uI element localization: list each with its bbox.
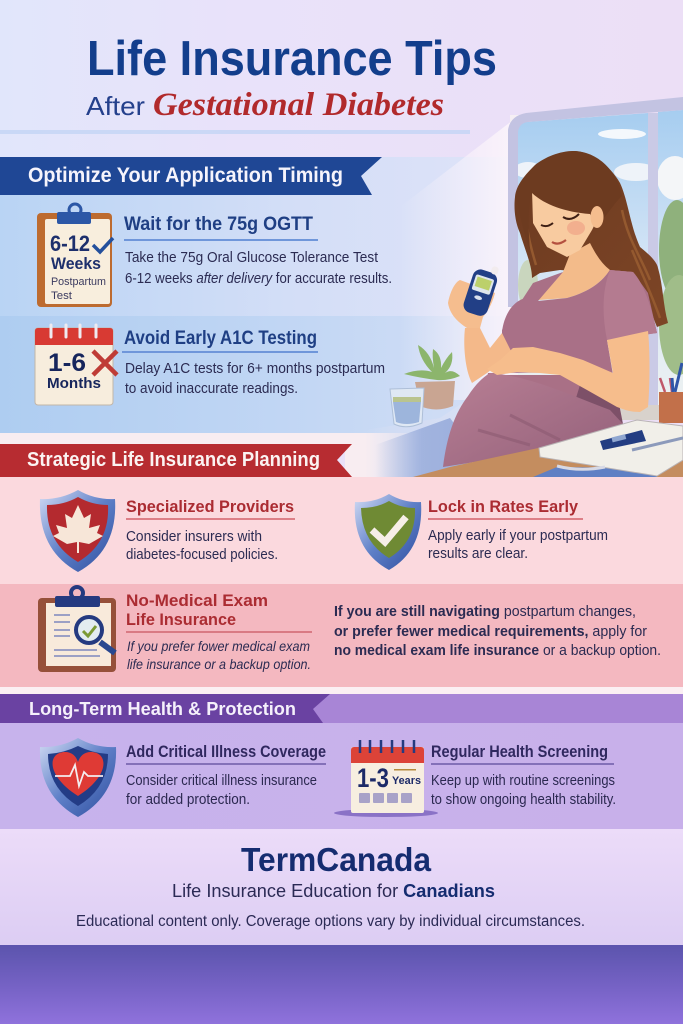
ear [590, 206, 604, 228]
icon: clipboard 6-12 weeks: Test [51, 290, 72, 302]
text block: critical illness: Add Critical Illness Coverage [126, 742, 326, 761]
potted plant [404, 345, 460, 410]
icon: calendar 1-3 years: 1-3 [357, 763, 389, 793]
panel: footer [0, 829, 683, 945]
chest and neck [538, 243, 610, 300]
belly [443, 373, 623, 467]
title block [86, 32, 497, 123]
blush [567, 221, 585, 235]
text block: lock in rates: Lock in Rates Early [428, 497, 579, 516]
icon: clipboard 6-12 weeks: Postpartum [51, 276, 106, 288]
water glass [390, 388, 424, 427]
lower shirt shadow [560, 373, 623, 450]
resting arm and hand [487, 331, 650, 412]
front hair [516, 151, 622, 250]
icon: clipboard 6-12 weeks [37, 204, 113, 307]
icon: maple leaf shield [40, 490, 115, 572]
icon: calendar 1-3 years: Years [392, 775, 421, 787]
illustration: pregnant woman with glucose meter [443, 151, 668, 467]
text block: specialized providers: diabetes-focused policies. [126, 547, 278, 563]
text block: postpartum changes advice: or prefer fewer medical requirements, apply for [334, 624, 647, 640]
text block: postpartum changes advice: If you are still navigating postpartum changes, [334, 604, 636, 620]
face [532, 190, 597, 257]
text block: lock in rates: results are clear. [428, 546, 528, 562]
window scene [508, 97, 683, 420]
text block: no-medical exam [126, 591, 312, 672]
panel: long-term health [0, 694, 683, 829]
light beam [400, 120, 513, 400]
icon: heart shield [40, 738, 116, 817]
panel: strategic planning [0, 477, 683, 687]
title block: Gestational Diabetes [153, 87, 444, 123]
text block: no-medical exam: Life Insurance [126, 610, 236, 629]
text block: wait for the OGTT [124, 214, 392, 287]
ribbon: application timing: Optimize Your Application Timing [28, 164, 343, 187]
text block: wait for the OGTT: Wait for the 75g OGTT [124, 214, 313, 235]
title block: After [86, 91, 145, 121]
text block: specialized providers [126, 497, 295, 563]
text block: avoid early A1C: Delay A1C tests for 6+ months postpartum [125, 361, 385, 377]
text block: specialized providers: Consider insurers with [126, 529, 262, 545]
text block: avoid early A1C: to avoid inaccurate readings. [125, 381, 298, 397]
text block: no-medical exam: If you prefer fower medical exam [127, 638, 310, 654]
text block: avoid early A1C: Avoid Early A1C Testing [124, 328, 317, 349]
icon: calendar 1-3 years [334, 740, 438, 817]
footer brand and disclaimer: Life Insurance Education for Canadians [172, 881, 495, 901]
icon: clipboard with magnifier [38, 587, 116, 672]
icon: calendar 1-6 months: Months [47, 375, 101, 392]
title block: Life Insurance Tips [87, 32, 497, 86]
smile [552, 240, 566, 244]
ribbon: application timing [0, 157, 382, 195]
ribbon: long-term health [0, 694, 330, 723]
icon: calendar 1-6 months: 1-6 [48, 349, 86, 377]
ribbon: strategic planning [0, 444, 352, 477]
text block: avoid early A1C [122, 328, 385, 397]
icon: clipboard 6-12 weeks: 6-12 [50, 231, 90, 256]
glucose meter [461, 261, 501, 318]
hand holding meter [448, 280, 495, 328]
papers with meter and pen [539, 420, 683, 476]
text block: lock in rates: Apply early if your postpartum [428, 528, 608, 544]
text block: wait for the OGTT: 6-12 weeks after delivery for accurate results. [125, 271, 392, 287]
bottom band [0, 945, 683, 1024]
text block: postpartum changes advice: no medical exam life insurance or a backup option. [334, 643, 661, 659]
hair strands [526, 205, 660, 318]
text block: no-medical exam: life insurance or a backup option. [127, 656, 311, 672]
gap [0, 687, 683, 694]
desk [413, 440, 683, 477]
text block: health screening: Regular Health Screening [431, 742, 608, 761]
footer brand and disclaimer: TermCanada [241, 841, 432, 878]
text block: health screening: Keep up with routine screenings [431, 773, 615, 789]
text block: critical illness [126, 742, 326, 808]
raised arm [464, 328, 512, 383]
pencil cup [659, 363, 683, 423]
closed eyes [541, 214, 579, 226]
footer brand and disclaimer [76, 841, 585, 930]
text block: specialized providers: Specialized Providers [126, 497, 294, 516]
hair back [515, 151, 668, 327]
footer brand and disclaimer: Educational content only. Coverage options vary by individual circumstances. [76, 913, 585, 930]
text block: critical illness: Consider critical illness insurance [126, 773, 317, 789]
text block: no-medical exam: No-Medical Exam [126, 591, 268, 610]
icon: calendar 1-6 months [35, 325, 117, 405]
icon: clipboard 6-12 weeks: Weeks [51, 254, 101, 273]
windowsill [365, 398, 500, 477]
text block: lock in rates [428, 497, 608, 562]
shirt torso [480, 270, 657, 435]
ribbon: strategic planning: Strategic Life Insurance Planning [27, 449, 320, 471]
text block: postpartum changes advice [334, 604, 661, 659]
text block: health screening: to show ongoing health stability. [431, 792, 616, 808]
text block: critical illness: for added protection. [126, 792, 250, 808]
ribbon: long-term health: Long-Term Health & Protection [29, 698, 296, 719]
panel: application timing background [0, 157, 520, 477]
text block: health screening [431, 742, 616, 808]
text block: wait for the OGTT: Take the 75g Oral Glucose Tolerance Test [125, 250, 378, 266]
icon: check shield [355, 494, 421, 570]
